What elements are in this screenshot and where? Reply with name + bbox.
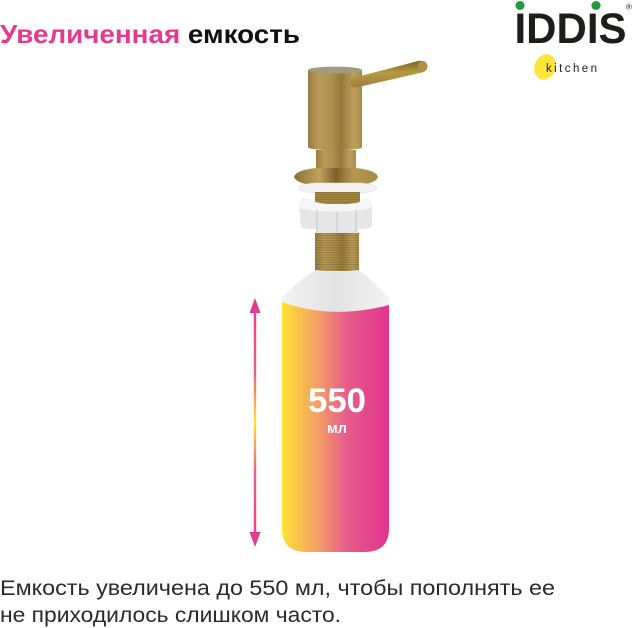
spout (350, 61, 428, 88)
capacity value: 550 (308, 382, 366, 420)
upper thread (315, 192, 360, 204)
bottle shoulder (282, 270, 389, 312)
pump head (308, 67, 362, 150)
logo wordmark: IDDIS (514, 5, 626, 53)
caption line 2: не приходилось слишком часто. (0, 604, 341, 627)
pump neck (316, 150, 356, 174)
logo kitchen text: kitchen (546, 63, 597, 75)
logo registered mark: ® (626, 2, 632, 12)
white plastic nut (299, 198, 372, 234)
caption line 1: Емкость увеличена до 550 мл, чтобы пополнять ее (0, 577, 555, 600)
flange (294, 168, 378, 186)
bottle liquid (282, 302, 389, 552)
capacity unit: мл (327, 421, 347, 437)
logo yellow blob (531, 51, 559, 83)
caption (0, 577, 555, 627)
title: Увеличенная емкость (0, 19, 300, 49)
washer (299, 183, 377, 193)
logo green dots (515, 1, 601, 10)
logo: IDDIS kitchen (514, 1, 632, 83)
threaded body (315, 233, 359, 271)
dispenser illustration (282, 61, 428, 552)
height arrow (250, 298, 260, 547)
